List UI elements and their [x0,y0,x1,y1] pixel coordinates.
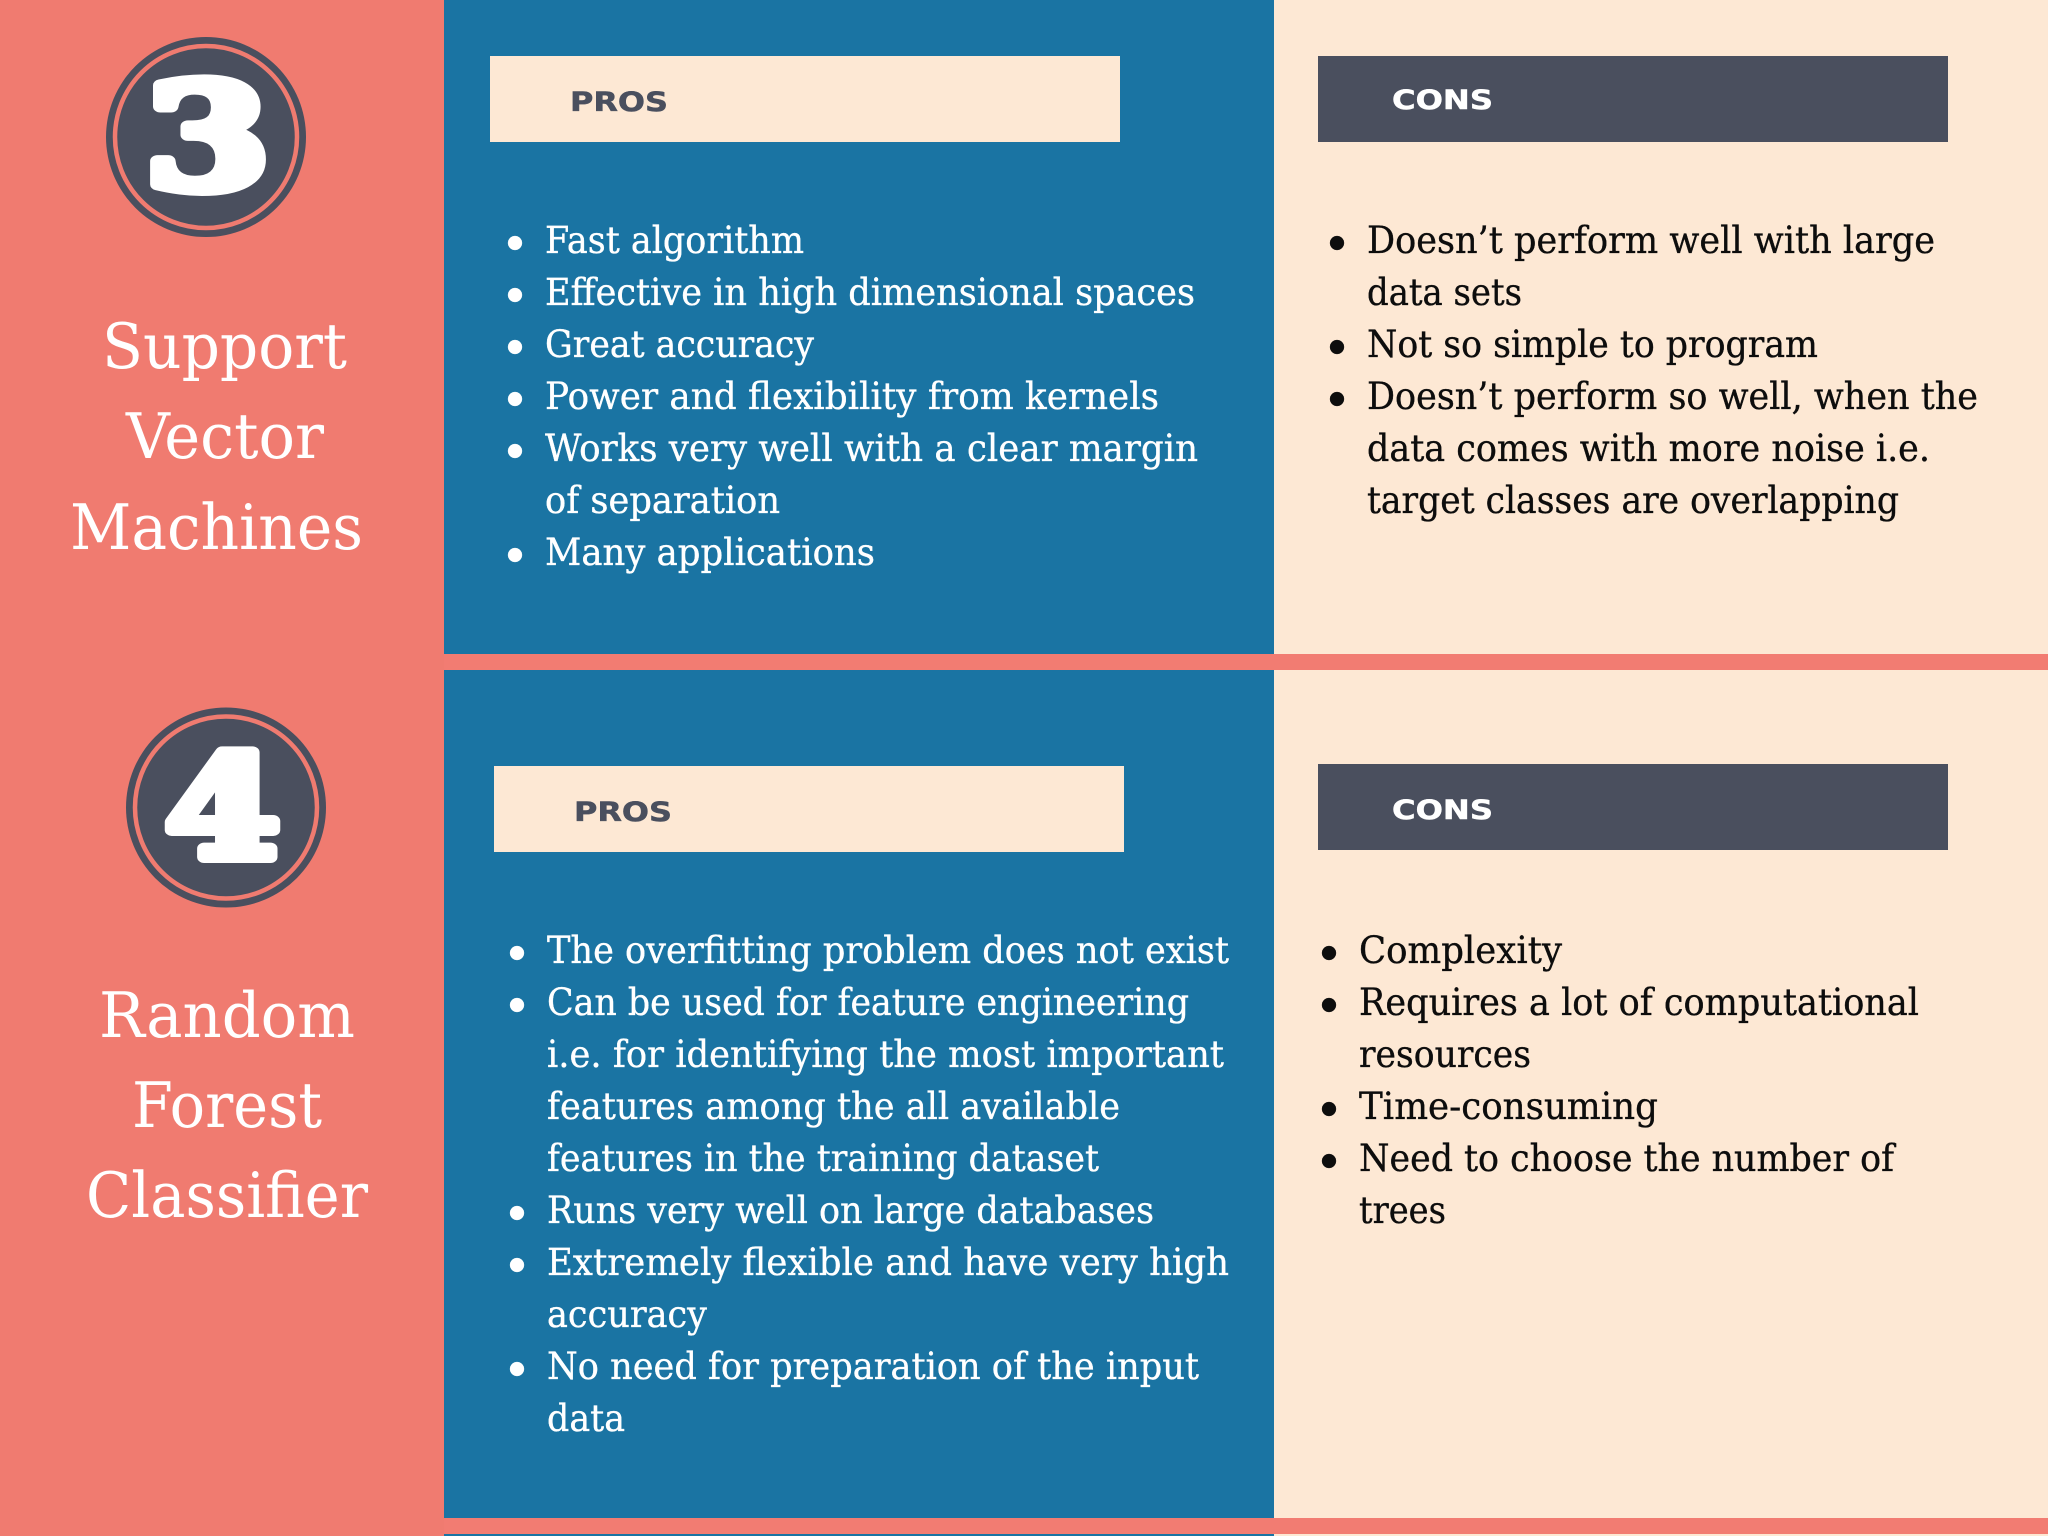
text block: Random Forest pros list: data [547,1397,625,1440]
panel: divider between rows [444,654,2048,670]
panel: pros column row 4 [444,670,1274,1518]
text block: SVM cons list: data comes with more noise i.e. [1367,427,1930,470]
text block: Random Forest cons list: trees [1359,1189,1446,1232]
heading: Random Forest Classifier [86,979,369,1232]
label bar: CONS row 3 [1318,56,1948,142]
text block: Random Forest pros list: Extremely flexible and have very high [547,1241,1229,1284]
text block: Random Forest pros list: Can be used for feature engineering [547,981,1189,1024]
text block: SVM cons list [1330,219,1978,522]
text block: SVM pros list: Effective in high dimensional spaces [545,271,1195,314]
icon: number 3 badge [106,37,306,237]
text block: Random Forest pros list: features among the all available [547,1085,1120,1128]
heading: Random Forest Classifier: Forest [132,1069,322,1142]
panel: cons column row 3 [1274,0,2048,654]
heading: Random Forest Classifier: Classifier [86,1159,369,1232]
text block: SVM cons list: Doesn’t perform well with large [1367,219,1935,262]
text block: Random Forest cons list: resources [1359,1033,1531,1076]
label bar: PROS row 4: PROS [574,797,672,828]
text block: SVM pros list: Works very well with a clear margin [545,427,1198,470]
text block: SVM pros list: Great accuracy [545,323,814,366]
text block: SVM pros list [508,219,1198,574]
text block: SVM cons list: target classes are overlapping [1367,479,1899,522]
text block: Random Forest pros list: No need for preparation of the input [547,1345,1199,1388]
text block: SVM pros list: Power and flexibility from kernels [545,375,1159,418]
text block: Random Forest pros list: features in the training dataset [547,1137,1099,1180]
text block: SVM cons list: data sets [1367,271,1522,314]
text block: SVM pros list: of separation [545,479,780,522]
text block: Random Forest pros list: The overfitting problem does not exist [547,929,1229,972]
panel: next row sliver cons [1274,1534,2048,1536]
heading: Support Vector Machines [70,310,363,564]
text block: Random Forest cons list: Complexity [1359,929,1562,972]
heading: Support Vector Machines: Support [102,310,347,383]
text block: Random Forest cons list: Requires a lot of computational [1359,981,1919,1024]
icon: number 3 badge: 3 [145,53,270,223]
label bar: CONS row 3: CONS [1392,85,1493,116]
text block: Random Forest pros list: Runs very well on large databases [547,1189,1154,1232]
text block: Random Forest cons list [1322,929,1919,1232]
label bar: PROS row 3: PROS [570,87,668,118]
text block: Random Forest pros list: accuracy [547,1293,707,1336]
label bar: PROS row 4 [494,766,1124,852]
label bar: PROS row 3 [490,56,1120,142]
text block: SVM cons list: Not so simple to program [1367,323,1818,366]
panel: divider at bottom [444,1518,2048,1534]
panel: next row sliver pros [444,1534,1274,1536]
text block: SVM pros list: Fast algorithm [545,219,804,262]
icon: number 4 badge [126,708,326,908]
panel: pros column row 3 [444,0,1274,654]
text block: Random Forest cons list: Need to choose the number of [1359,1137,1896,1180]
heading: Support Vector Machines: Vector [125,400,325,473]
panel: left sidebar [0,0,444,1536]
text block: Random Forest cons list: Time-consuming [1359,1085,1658,1128]
icon: number 4 badge: 4 [165,726,280,891]
label bar: CONS row 4 [1318,764,1948,850]
heading: Support Vector Machines: Machines [70,491,363,564]
text block: SVM pros list: Many applications [545,531,875,574]
label bar: CONS row 4: CONS [1392,795,1493,826]
text block: Random Forest pros list: i.e. for identifying the most important [547,1033,1224,1076]
text block: SVM cons list: Doesn’t perform so well, when the [1367,375,1978,418]
panel: cons column row 4 [1274,670,2048,1518]
text block: Random Forest pros list [510,929,1229,1440]
heading: Random Forest Classifier: Random [99,979,355,1052]
